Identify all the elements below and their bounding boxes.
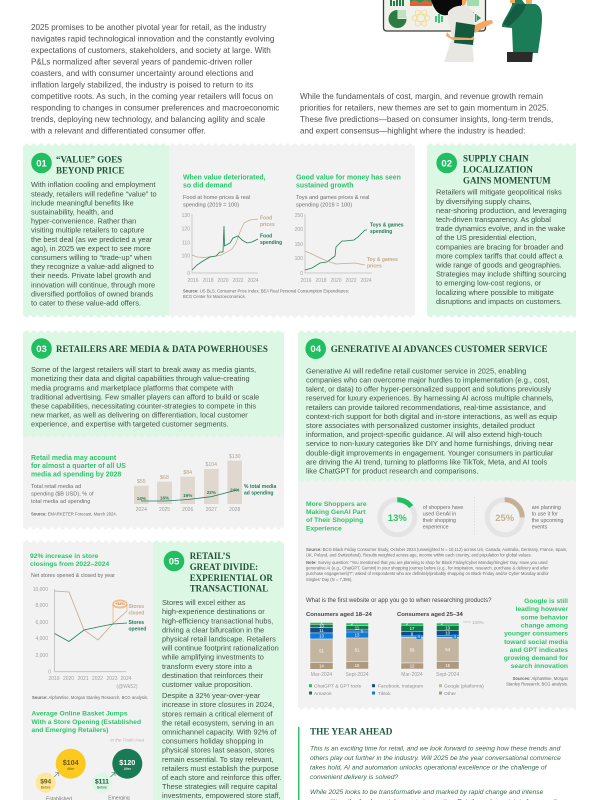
stacked bars: consumers aged 18-24: 13 <box>319 634 324 638</box>
stacked bars: consumers aged 18-24 <box>306 612 373 678</box>
chart: toys and games prices and spending: Toy & games <box>367 257 398 263</box>
stacked bars: consumers aged 18-24: Mar-2024 <box>311 672 332 678</box>
stacked bars: consumers aged 25-34: 8 <box>411 632 414 636</box>
badge 01 <box>31 153 52 173</box>
donut caption 13%: experience <box>423 524 449 530</box>
stacked bars: consumers aged 18-24: 1 <box>320 620 323 624</box>
body 05 paragraph 1: transform every store into a <box>162 662 253 671</box>
callout: Google still leading: and GPT indicates <box>510 647 568 654</box>
body 04: reserved for luxury experiences. By harnessing AI across multiple channels, <box>306 394 554 403</box>
body 03: experience, and expertise with targeted customer segments. <box>31 420 229 429</box>
callout: Google still leading: Google is still <box>524 598 568 605</box>
body 01: visiting multiple retailers to capture <box>31 226 144 235</box>
bubble chart: established retailers: $104 <box>63 758 79 767</box>
bar chart: retail media spending: $84 <box>183 470 192 476</box>
bar chart: retail media spending: 24% <box>230 488 239 492</box>
chart: toys and games prices and spending: Good value for money has seen <box>296 174 401 182</box>
stacked bars: consumers aged 18-24: Sept-2024 <box>345 672 369 678</box>
body 01: sustainability, health, and <box>31 208 113 216</box>
chart: food prices and spending: 2024 <box>247 278 259 284</box>
body 02: near-shoring production, and leveraging <box>436 206 567 215</box>
line chart: stores opened and closed: closed <box>128 610 144 616</box>
body 05 paragraph 2: consumers holiday shopping in <box>162 737 263 746</box>
badge 03 <box>31 338 52 359</box>
bar chart: retail media spending: 2025 <box>159 507 170 513</box>
chart: food prices and spending: 100 <box>182 254 190 260</box>
stacked bars: consumers aged 25-34: 12 <box>410 664 415 668</box>
body 04: talent, or data) to offer hyper-personalized support and solutions previously <box>306 385 551 394</box>
stacked bars: consumers aged 25-34: Mar-2024 <box>401 672 423 678</box>
stacked bars: consumers aged 25-34 <box>397 612 484 678</box>
sources callout: Stanley Research; BCG analysis. <box>506 682 568 687</box>
stacked bars: consumers aged 25-34: Sept-2024 <box>436 672 459 678</box>
source 01: Source: <box>183 288 199 294</box>
chart: toys and games prices and spending: 2020 <box>330 278 342 284</box>
chart: food prices and spending: Food <box>260 216 272 222</box>
year ahead heading: THE YEAR AHEAD <box>310 726 393 736</box>
body 05 paragraph 1: high-experience destinations or <box>162 607 265 616</box>
stacked bars: consumers aged 25-34: 4 <box>418 634 421 639</box>
body 01: ago), in 2025 we expect to see more <box>31 244 151 253</box>
donut caption 13%: used GenAI in <box>423 512 456 518</box>
bar chart: retail media spending: 19% <box>183 493 192 498</box>
body 02: localizing where possible to mitigate <box>436 288 554 297</box>
genAI title: Experience <box>306 525 342 532</box>
source 01: BCG Center for Macroeconomics. <box>183 294 246 299</box>
chart: toys and games prices and spending <box>295 174 404 284</box>
source and note 04: Singles’ Day (N = 7,386). <box>306 577 353 582</box>
body 05 paragraph 1: driving a clear bifurcation in the <box>162 625 264 634</box>
heading 02: SUPPLY CHAIN <box>463 153 529 163</box>
heading 02: LOCALIZATION <box>463 164 533 174</box>
heading 01: “VALUE” GOES <box>56 154 122 164</box>
stacked bars: consumers aged 25-34: 4 <box>454 634 457 639</box>
intro text right: and expert consensus—highlight where the industry is headed: <box>300 126 525 136</box>
retail media title: for almost a quarter of all US <box>31 463 126 470</box>
panel: 03 retail media <box>23 330 284 530</box>
stacked bars: consumers aged 18-24: 2 <box>351 621 354 626</box>
question heading: What is the first website or app you go to when researching products? <box>306 598 492 604</box>
body 04: context-rich support for both digital and in-store interactions, as well as equip <box>306 412 557 421</box>
chart: food prices and spending: Food <box>260 234 272 240</box>
badge 04: 04 <box>310 344 322 355</box>
line chart: stores opened and closed: 4,000 <box>35 636 48 642</box>
line chart: stores opened and closed: (@Wk52) <box>116 684 138 690</box>
line chart: stores opened and closed: 2022 <box>92 676 103 682</box>
chart: food prices and spending: Food at home prices & real <box>183 195 250 201</box>
chart: food prices and spending: spending (2019 = 100) <box>183 202 239 208</box>
body 04: like ChatGPT for product research and comparisons. <box>306 466 478 476</box>
badge 02: 02 <box>441 158 452 169</box>
heading 05: EXPERIENTIAL OR <box>190 573 273 583</box>
bubble chart: established retailers: $94 <box>40 778 52 786</box>
chart: food prices and spending: 2020 <box>217 278 229 284</box>
line chart: stores opened and closed: 2023 <box>106 676 118 682</box>
source and note 04: Source: BCG Black Friday Consumer Study, October 2024 (unweighted N = 10,112) across US, Canada, Australia, Germany, France, Spain, <box>306 547 567 552</box>
body 03: new market, as well as delivering on differentiation, local customer <box>31 411 248 420</box>
line chart: stores opened and closed: 2024 <box>120 676 132 682</box>
line chart: stores opened and closed: 10,000 <box>33 587 48 593</box>
stacked bars: consumers aged 25-34: 54 <box>445 647 451 652</box>
body 04: companies who can overcome major hurdles to implementation (e.g., cost, <box>306 376 550 384</box>
body 04: store associates with personalized customer insights, detailed product <box>306 421 535 430</box>
body 01: their needs. Private label growth and <box>31 271 151 280</box>
line chart: stores opened and closed: 2021 <box>77 676 89 682</box>
chart: food prices and spending: 120 <box>182 226 190 232</box>
legend: Facebook, Instagram <box>378 684 423 690</box>
heading 05: TRANSACTIONAL <box>190 584 268 594</box>
chart: toys and games prices and spending: 2024 <box>360 278 372 284</box>
bar chart: retail media spending: $104 <box>206 462 217 468</box>
callout: Google still leading: leading however <box>516 606 568 613</box>
legend: ChatGPT & GPT tools <box>314 684 362 690</box>
chart: food prices and spending: prices <box>260 222 275 228</box>
heading 02: GAINS MOMENTUM <box>463 175 551 185</box>
retail media subtitle: spending ($B USD), % of <box>31 492 94 498</box>
source 03: Source: EMARKETER Forecast, March 2024. <box>31 512 117 516</box>
stacked bars: consumers aged 18-24: Consumers aged 18–24 <box>306 612 373 618</box>
legend: Amazon <box>314 691 332 697</box>
stacked bars: consumers aged 18-24: 5 <box>361 628 364 634</box>
stacked bars: consumers aged 25-34: 100% <box>472 620 484 625</box>
body 02: Retailers will mitigate geopolitical risks <box>436 188 562 197</box>
body 05 paragraph 2: Despite a 32% year-over-year <box>162 691 261 700</box>
source and note 04: Note: Survey question: “You mentioned that you are planning to shop for Black Friday/Cyber Monday/Singles’ Day. Have you used <box>306 560 547 565</box>
body 05 paragraph 2: omnichannel capacity. With 92% of <box>162 728 277 736</box>
chart: toys and games prices and spending: 2018 <box>315 278 327 284</box>
donut caption 25%: events <box>532 524 548 530</box>
body 04: information, and project-specific guidance. AI will also extend high-touch <box>306 430 542 439</box>
line chart: stores opened and closed: 6,000 <box>35 620 48 626</box>
heading 01: BEYOND PRICE <box>56 165 124 175</box>
heading 05: GREAT DIVIDE: <box>190 562 258 572</box>
store closings title: 92% increase in store <box>30 553 99 560</box>
body 01: hyper-convenience. Rather than <box>31 217 136 226</box>
heading 04: GENERATIVE AI ADVANCES CUSTOMER SERVICE <box>331 344 547 354</box>
chart: toys and games prices and spending: 2016 <box>300 278 312 284</box>
retail media subtitle: Total retail media ad <box>31 484 81 490</box>
bar chart: retail media spending: 2024 <box>136 507 147 513</box>
heading 03: RETAILERS ARE MEDIA & DATA POWERHOUSES <box>56 344 268 354</box>
line chart: stores opened and closed: 0 <box>48 670 51 676</box>
body 04: service to non-luxury categories like DIY and home furnishings, driving near <box>306 439 554 448</box>
retail media subtitle: total media ad spending <box>31 499 90 505</box>
bar chart: retail media spending: % total media <box>244 484 276 490</box>
source and note 04: generative AI (e.g., ChatGPT, Gemini) in your shopping journey before (e.g., for inspiration, research, purchase & delivery and after <box>306 566 549 571</box>
body 03: traditional advertising. Few smaller players can afford to build or scale <box>31 392 259 401</box>
bar chart: retail media spending: 16% <box>160 495 169 500</box>
intro text left <box>30 23 279 136</box>
body 01: consumers willing to “trade-up” when <box>31 253 152 262</box>
legend: Other <box>444 691 456 697</box>
body 04: retailers can provide tailored recommendations, real-time assistance, and <box>306 403 546 412</box>
chart: food prices and spending: 2018 <box>202 278 214 284</box>
line chart: stores opened and closed: 2019 <box>48 676 60 682</box>
panel: 02 supply chain localization <box>427 143 576 318</box>
body 05 paragraph 1: high-efficiency transactional hubs, <box>162 616 273 625</box>
heading 05: RETAIL’S <box>190 551 230 561</box>
basket title: Average Online Basket Jumps <box>32 710 128 718</box>
bubble chart: emerging retailers: Before <box>97 786 107 790</box>
year ahead text: takes hold, AI and automation unlocks operational excellence or the challenge of <box>310 764 548 771</box>
body 05 paragraph 2: retailers must establish the purpose <box>162 764 279 773</box>
body 05 paragraph 1: Stores will excel either as <box>162 598 246 607</box>
callout: Google still leading: some behavior <box>521 614 568 621</box>
intro text left: coasters, and with consumer uncertainty around elections and <box>31 69 253 78</box>
bubble chart: established retailers: Before <box>41 786 51 790</box>
body 02: disruptions and impacts on customers. <box>436 297 562 306</box>
body 02: by diversifying supply chains, <box>436 197 532 206</box>
stacked bars: consumers aged 25-34: 2 <box>406 621 409 626</box>
line chart: stores opened and closed: 2,000 <box>35 653 48 659</box>
bar chart: retail media spending: 2026 <box>182 507 193 513</box>
body 04: are driving the AI trend, turning to platforms like TikTok, Meta, and AI tools <box>306 457 547 466</box>
body 05 paragraph 1: destination that reinforces their <box>162 671 264 680</box>
body 05 paragraph 1: physical retail landscape. Retailers <box>162 634 276 644</box>
badge 05 <box>164 551 184 571</box>
chart: toys and games prices and spending: 0 <box>300 271 303 277</box>
panel: the year ahead <box>298 726 562 800</box>
bar chart: retail media spending: 2028 <box>229 507 240 513</box>
chart: toys and games prices and spending: 100 <box>295 256 303 262</box>
bar chart: retail media spending: 14% <box>137 496 146 501</box>
year ahead text: This is an exciting time for retail, and we look forward to seeing how these trends and <box>310 746 561 753</box>
intro text left: with a relevant and differentiated consumer offer. <box>30 126 206 136</box>
intro text right: priorities for retailers, new themes are set to gain momentum in 2025. <box>300 104 549 112</box>
line chart: stores opened and closed: Stores <box>128 604 144 610</box>
illustration: two people at a whiteboard <box>384 0 542 62</box>
line chart: stores opened and closed: 2020 <box>63 676 74 682</box>
body 03: monetizing their data and digital capabilities through value-creating <box>31 374 250 383</box>
bar chart: retail media spending: $55 <box>137 479 146 485</box>
legend <box>309 684 484 697</box>
legend: Google (platforms) <box>444 684 484 690</box>
stacked bars: consumers aged 25-34: 2 <box>441 621 444 626</box>
genAI title: More Shoppers are <box>306 501 367 508</box>
donut caption 13%: of shoppers have <box>423 505 463 511</box>
in the trade area: In the Trade Area <box>110 738 145 742</box>
bubble chart: emerging retailers: $111 <box>95 778 109 786</box>
retail media title: Retail media may account <box>31 455 117 462</box>
intro text left: inflation largely stabilized, the industry is poised to return to its <box>31 80 253 90</box>
stacked bars: consumers aged 18-24: 11 <box>355 625 360 630</box>
bubble chart: emerging retailers: After <box>124 767 132 771</box>
stacked bars: consumers aged 18-24: 51 <box>355 648 360 652</box>
year ahead text: convenient delivery is solved? <box>310 774 399 781</box>
bar chart: retail media spending <box>134 454 276 513</box>
intro text left: navigates rapid technological innovation and the constantly evolving <box>31 34 274 44</box>
chart: toys and games prices and spending: sustained growth <box>296 183 353 190</box>
stacked bars: consumers aged 25-34: 10 <box>445 631 451 636</box>
stacked bars: consumers aged 25-34: 56 <box>410 648 415 652</box>
body 05 paragraph 2: stores remain a critical element of <box>162 709 273 718</box>
badge 05: 05 <box>169 556 180 567</box>
donut: 25%: 25% <box>495 513 515 524</box>
bubble chart: emerging retailers <box>92 749 142 800</box>
body 05 paragraph 2: the retail ecosystem, serving in an <box>162 718 274 727</box>
body 03: media programs and marketplace platforms that compete with <box>31 383 234 392</box>
legend: Tiktok <box>378 691 391 697</box>
sources callout: AlphaWise, Morgan <box>531 676 569 681</box>
callout: Google still leading: search innovation <box>511 663 568 670</box>
stacked bars: consumers aged 25-34: 17 <box>410 626 415 631</box>
donut caption 25%: to use it for <box>532 512 558 518</box>
body 05 paragraph 2: physical stores last season, stores <box>162 746 275 755</box>
line chart: stores opened and closed: opened <box>128 627 146 633</box>
body 02: trade dynamics evolve, and in the wake <box>436 224 565 233</box>
intro text right: While the fundamentals of cost, margin, and revenue growth remain <box>300 92 543 101</box>
body 03: these capabilities, necessitating counter-strategies to compete in this <box>31 402 256 410</box>
panel: store closings and basket <box>23 540 154 800</box>
chart: food prices and spending: 130 <box>182 213 190 219</box>
panel: 01 value beyond price <box>23 143 415 318</box>
line chart: stores opened and closed: +32% <box>115 602 126 606</box>
line chart: stores opened and closed: Stores <box>128 620 144 626</box>
badge 04 <box>305 338 326 359</box>
body 04: double-digit improvements in engagement. Younger consumers in particular <box>306 448 554 457</box>
body 02: of the US presidential election, <box>436 233 536 242</box>
stacked bars: consumers aged 18-24: 11 <box>319 628 324 633</box>
bar chart: retail media spending: 22% <box>207 490 216 495</box>
bubble chart: emerging retailers: $120 <box>119 758 135 767</box>
source and note 04: UK, Poland, and Switzerland). Results weighted across age, income within each country, and population for global values. <box>306 553 532 558</box>
donut caption 25%: are planning <box>532 505 561 511</box>
intro text left: trends, deploying new technology, and balancing agility and scale <box>31 115 266 124</box>
callout: Google still leading: growing demand for <box>504 655 568 662</box>
body 05 paragraph 1: customer value proposition. <box>162 680 252 689</box>
retail media title: media ad spending by 2028 <box>31 471 121 478</box>
chart: food prices and spending: 0 <box>187 271 190 277</box>
basket title: and Emerging Retailers) <box>32 727 108 734</box>
body 02: more complex tariffs that could affect a <box>436 251 564 260</box>
intro text left: responding to changes in consumer preferences and macroeconomic <box>31 104 279 112</box>
stacked bars: consumers aged 25-34: Consumers aged 25–34 <box>397 612 464 618</box>
chart: toys and games prices and spending: prices <box>367 264 382 270</box>
body 05 paragraph 2: remain essential. To stay relevant, <box>162 755 274 764</box>
body 02: Strategies may include shifting sourcing <box>436 270 566 279</box>
source and note 04 <box>306 547 567 582</box>
donut caption 13%: their shopping <box>423 518 456 524</box>
chart: food prices and spending: 110 <box>182 240 190 246</box>
body 02: to emerging low-cost regions, or <box>436 279 542 288</box>
bubble chart: established retailers <box>36 749 86 800</box>
panel: 04 generative AI <box>298 330 576 710</box>
chart: food prices and spending: so did demand <box>183 183 232 190</box>
bar chart: retail media spending: ad spending <box>244 491 273 497</box>
stacked bars: consumers aged 18-24: 15 <box>355 663 360 668</box>
stacked bars: consumers aged 18-24: 14 <box>319 664 324 668</box>
donut: 13% <box>380 500 415 535</box>
chart: toys and games prices and spending: 2022 <box>345 278 357 284</box>
chart: toys and games prices and spending: 200 <box>295 227 303 233</box>
line chart: stores opened and closed: 8,000 <box>35 603 48 609</box>
bubble chart: established retailers: After <box>67 767 75 771</box>
stacked bars: consumers aged 25-34: 13 <box>445 626 451 631</box>
callout: Google still leading: toward social media <box>504 639 568 646</box>
source store chart: Source: AlphaWise, Morgan Stanley Research, BCG analysis. <box>32 695 148 700</box>
badge 02 <box>436 153 457 173</box>
bar chart: retail media spending: $68 <box>160 475 169 481</box>
stacked bars: consumers aged 18-24: 10 <box>319 624 324 628</box>
donut caption 25%: the upcoming <box>532 518 564 524</box>
badge 03: 03 <box>36 344 47 355</box>
body 01: With inflation cooling and employment <box>31 180 155 189</box>
body 04: Generative AI will redefine retail customer service in 2025, enabling <box>306 366 526 375</box>
chart: food prices and spending: spending <box>260 240 282 246</box>
badge 01: 01 <box>36 158 47 169</box>
genAI title: Making GenAI Part <box>306 509 366 516</box>
callout: Google still leading: change among <box>521 622 568 629</box>
body 03: Some of the largest retailers will start to break away as media giants, <box>31 365 256 374</box>
year ahead text: others play out further in the industry. Will 2025 be the year conversational commerce <box>310 755 561 762</box>
intro text left: 2025 promises to be another pivotal year for retail, as the industry <box>31 23 267 32</box>
stacked bars: consumers aged 25-34: 15 <box>445 663 451 668</box>
body 05 paragraph 2: investments, empowered store staff, <box>162 791 281 800</box>
intro text left: competitive roots. As such, in the coming year retailers will focus on <box>31 92 273 101</box>
source 01: US BLS, Consumer Price Index; BEA Real Personal Consumption Expenditures; <box>199 288 349 294</box>
stacked bars: consumers aged 18-24: 13 <box>355 633 360 638</box>
chart: toys and games prices and spending: spending (2019 = 100) <box>296 202 352 208</box>
panel: 05 retail's great divide <box>153 540 284 800</box>
body 01: innovation will continue, through more <box>31 280 155 289</box>
chart: toys and games prices and spending: Toys & games <box>370 222 404 228</box>
body 02: wide range of goods and geographies. <box>435 260 562 270</box>
line chart: stores opened and closed <box>33 587 146 690</box>
intro text right: These five predictions—based on consumer insights, long-term trends, <box>300 115 553 124</box>
body 05 paragraph 2: of each store and reinforce this offer. <box>162 773 282 782</box>
body 01: diversified portfolios of owned brands <box>31 289 153 298</box>
stacked bars: consumers aged 18-24: 51 <box>319 648 324 654</box>
chart: toys and games prices and spending: 250 <box>295 213 303 219</box>
basket title: With a Store Opening (Established <box>32 719 141 726</box>
chart: food prices and spending: 2016 <box>187 278 199 284</box>
source and note 04: purchase engagement)?”; asked of respondents who are definitely/probably shopping on Black Friday and/or Cyber Monday and/or <box>306 571 549 576</box>
body 05 paragraph 1: while amplifying investments to <box>161 653 264 662</box>
body 02: companies are bracing for broader and <box>436 242 563 251</box>
bar chart: retail media spending: 2027 <box>206 507 217 513</box>
chart: toys and games prices and spending: Toys and games prices & real <box>296 195 369 201</box>
donut: 25% <box>487 500 522 535</box>
bar chart: retail media spending: $130 <box>229 454 241 460</box>
body 01: they recognize a value-add aligned to <box>31 262 154 271</box>
genAI title: of Their Shopping <box>306 517 363 524</box>
body 05 paragraph 1: will continue footprint rationalization <box>161 644 279 653</box>
donut: 13%: 13% <box>388 513 407 524</box>
chart: food prices and spending: When value deteriorated, <box>183 174 266 182</box>
store closings subtitle: Net stores opened & closed by year <box>31 573 115 579</box>
body 01: the best deal (as we predicted a year <box>31 235 153 244</box>
body 01: to cater to these value-add offers. <box>31 298 141 308</box>
intro text left: expectations of customers, stakeholders, and society at large. With <box>31 46 271 55</box>
intro text left: P&Ls normalized after several years of pandemic-driven roller <box>31 58 253 66</box>
body 02: tech-driven transparency. As global <box>436 215 551 224</box>
chart: toys and games prices and spending: spending <box>370 229 392 235</box>
body 01: steady, retailers will redefine “value” to <box>31 189 157 198</box>
body 01: include meaningful benefits like <box>31 198 134 207</box>
body 05 paragraph 2: increase in store closures in 2024, <box>162 700 274 709</box>
sources callout: Sources: <box>513 676 531 681</box>
year ahead text: While 2025 looks to be transformative and marked by rapid change and intense <box>310 789 544 796</box>
callout: Google still leading: younger consumers <box>504 631 568 638</box>
store closings title: closings from 2022–2024 <box>30 561 109 568</box>
chart: food prices and spending: 2022 <box>232 278 244 284</box>
body 05 paragraph 2: These strategies will require capital <box>162 782 278 791</box>
chart: food prices and spending <box>182 174 282 284</box>
chart: toys and games prices and spending: 150 <box>295 242 303 248</box>
intro text right <box>300 92 553 136</box>
